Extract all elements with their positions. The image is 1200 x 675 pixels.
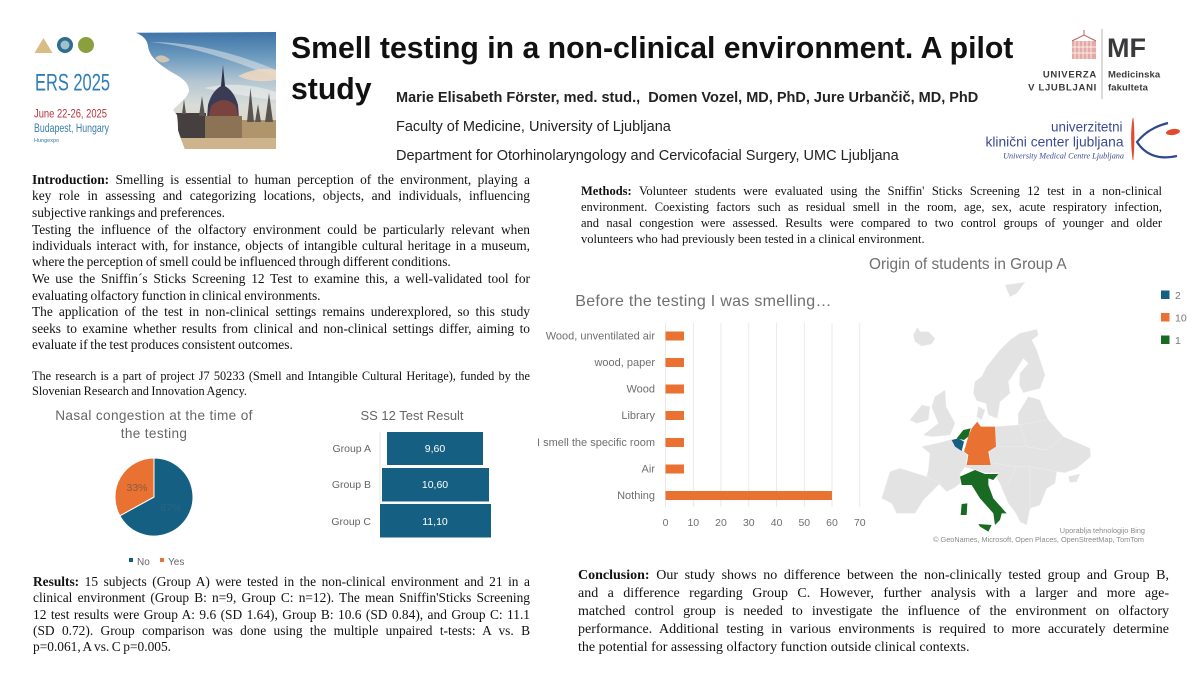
category labels: Wood, unventilated air [546, 330, 655, 342]
bar: Group A: Group A [332, 443, 371, 455]
university name [1028, 70, 1097, 94]
category labels: Wood [626, 384, 655, 396]
university name: UNIVERZA [1043, 70, 1097, 80]
value axis: 70 [854, 517, 866, 529]
europe map [882, 282, 1091, 532]
text block: conclusion: performance. Additional testing in various environments is required to more accurately determine [578, 622, 1169, 637]
title: Smell testing in a non-clinical environment. A pilot study [291, 32, 1013, 106]
text block: introduction: seeks to examine whether results from clinical and non-clinical settings differ, aiming to [32, 321, 530, 336]
hospital name: univerzitetni [1051, 120, 1123, 134]
value axis: 30 [743, 517, 755, 529]
legend [1161, 290, 1187, 347]
faculty name [1108, 70, 1161, 94]
legend: Yes [168, 557, 184, 568]
value axis: 0 [663, 517, 669, 529]
text block: results: clinical environment (Group B: n=9, Group C: n=12). The mean Sniffin'Sticks Screening [33, 590, 530, 605]
bars [666, 332, 832, 500]
slice label 33%: 33% [126, 482, 148, 494]
icon: UKC mark [1132, 118, 1180, 160]
text block: introduction: The application of the test in non-clinical settings remains underexplored, so this study [32, 304, 530, 319]
text block: introduction: Testing the influence of the olfactory environment could be particularly relevant when [32, 222, 530, 237]
hospital name [985, 120, 1124, 150]
chart title: Before the testing I was smelling… [575, 293, 832, 310]
text block: conclusion [578, 568, 1169, 655]
map: origin of students in Group A [869, 256, 1187, 544]
value axis: 40 [771, 517, 783, 529]
legend [129, 557, 184, 568]
value axis [663, 517, 866, 529]
conference name: ERS 2025 [35, 70, 110, 96]
category labels: Nothing [617, 490, 655, 502]
legend: 10 [1175, 312, 1187, 324]
authors: Marie Elisabeth Förster, med. stud., Domen Vozel, MD, PhD, Jure Urbančič, MD, PhD [396, 90, 978, 106]
university name: V LJUBLJANI [1028, 82, 1097, 94]
text block: methods: volunteers who had previously been tested in a clinical environment. [581, 232, 925, 246]
conference place: Budapest, Hungary [34, 123, 109, 135]
icon: university building [1072, 30, 1096, 59]
text block: results: 12 test results were Group A: 9.6 (SD 1.64), Group B: 10.6 (SD 0.84), and Group C: 11.1 [33, 607, 530, 622]
text block: introduction: Slovenian Research and Innovation Agency. [32, 384, 247, 398]
value axis: 60 [826, 517, 838, 529]
hospital name: klinični center ljubljana [985, 134, 1124, 150]
text block: results [33, 574, 530, 654]
bar chart: before the testing I was smelling [537, 293, 866, 529]
text block: introduction: key role in assessing and categorizing locations, objects, and individuals, influencing [32, 188, 530, 203]
chart title: the testing [121, 426, 187, 441]
text block: methods: and nasal congestion were assessed. Results were compared to two control groups of younger and older [581, 216, 1162, 230]
bar: Group A: 9,60 [425, 443, 445, 455]
text block: introduction: subjective rankings and preferences. [32, 205, 225, 220]
MF wordmark: MF [1107, 33, 1146, 63]
organiser: Hungexpo [34, 138, 59, 144]
text block: conclusion: and a difference regarding Group C. However, further analysis with a larger and more age- [578, 586, 1169, 601]
text block: introduction: evaluate if the test produces consistent outcomes. [32, 337, 293, 352]
category labels: Air [642, 464, 655, 476]
bar: Group B: 10,60 [422, 479, 448, 491]
icon: society emblems [34, 37, 94, 53]
conference logo: ERS 2025 [34, 37, 110, 144]
conference date: June 22-26, 2025 [34, 108, 107, 120]
value axis: 10 [687, 517, 699, 529]
country: Italy [960, 470, 1007, 532]
pie slice: Yes 33% [115, 458, 154, 516]
text block: introduction: evaluating olfactory function in clinical environments. [32, 288, 321, 303]
text block: introduction: individuals interact with, for instance, objects of intangible cultural heritage in a museum, [32, 238, 530, 253]
divider [1101, 29, 1103, 99]
chart title: Origin of students in Group A [869, 256, 1067, 273]
logo: University Medical Centre Ljubljana [985, 118, 1180, 160]
country: Belgium [952, 438, 964, 451]
category labels: wood, paper [593, 357, 655, 369]
text block: conclusion: the potential for assessing olfactory function outside clinical contexts. [578, 640, 970, 655]
chart title: Nasal congestion at the time of [55, 408, 253, 423]
map attribution: © GeoNames, Microsoft, Open Places, OpenStreetMap, TomTom [933, 535, 1144, 544]
text block: conclusion: matched control group is needed to investigate the influence of the environment on olfactory [578, 604, 1169, 619]
country: Netherlands [957, 428, 971, 440]
pie chart: nasal congestion [55, 408, 253, 568]
text block: introduction: Introduction: Smelling is essential to human perception of the environment, playing a [32, 172, 530, 187]
country: Germany [964, 422, 996, 465]
category labels [537, 330, 655, 502]
category labels: I smell the specific room [537, 437, 655, 449]
bar: Group C: 11,10 [422, 516, 448, 528]
image: Budapest parliament in face silhouette [130, 32, 280, 150]
text block: methods: Methods: Volunteer students were evaluated using the Sniffin' Sticks Screening 12 test in a non-clinical [581, 184, 1162, 198]
category labels: Library [621, 410, 655, 422]
legend: No [137, 557, 150, 568]
bar: Group C [331, 504, 491, 538]
logo: University of Ljubljana Faculty of Medicine [1028, 29, 1161, 99]
text block: results: p=0.061, A vs. C p=0.005. [33, 639, 171, 654]
chart title [55, 408, 253, 441]
text block: methods: environment. Coexisting factors such as residual smell in the room, age, sex, acute respiratory infection, [581, 200, 1162, 214]
map attribution: Uporablja tehnologijo Bing [1060, 526, 1145, 535]
funnel chart: SS 12 test result [331, 408, 491, 538]
map attribution [933, 526, 1145, 544]
legend: 2 [1175, 290, 1181, 302]
text block: methods [581, 184, 1162, 246]
bar: Group B [332, 468, 489, 502]
text block: results: Results: 15 subjects (Group A) were tested in the non-clinical environment and 21 in a [33, 574, 530, 589]
affiliation: department: Department for Otorhinolaryngology and Cervicofacial Surgery, UMC Ljubljana [396, 148, 899, 164]
legend: 1 [1175, 335, 1181, 347]
text block: introduction: where the perception of smell could be influenced through different conditions. [32, 254, 451, 269]
chart title: SS 12 Test Result [360, 408, 464, 423]
value axis: 50 [798, 517, 810, 529]
text block: introduction: The research is a part of project J7 50233 (Smell and Intangible Cultural Heritage), funded by the [32, 369, 530, 383]
slice label 67%: 67% [160, 502, 182, 514]
faculty name: fakulteta [1108, 82, 1149, 94]
faculty name: Medicinska [1108, 70, 1161, 80]
text block: results: (SD 0.72). Group comparison was done using the multiple unpaired t-tests: A vs. B [33, 623, 530, 638]
value axis: 20 [715, 517, 727, 529]
hospital english name: University Medical Centre Ljubljana [1003, 152, 1124, 160]
bar: Group C: Group C [331, 516, 371, 528]
text block: introduction [32, 172, 530, 398]
bar: Group B: Group B [332, 479, 371, 491]
pie slice: No 67% [120, 458, 193, 536]
bar: Group A [332, 432, 483, 465]
text block: introduction: We use the Sniffin´s Sticks Screening 12 Test to examine this, a well-validated tool for [32, 271, 530, 286]
affiliation: faculty: Faculty of Medicine, University of Ljubljana [396, 119, 671, 135]
other countries [882, 282, 1091, 525]
text block: conclusion: Conclusion: Our study shows no difference between the non-clinically tested group and Group B, [578, 568, 1169, 583]
